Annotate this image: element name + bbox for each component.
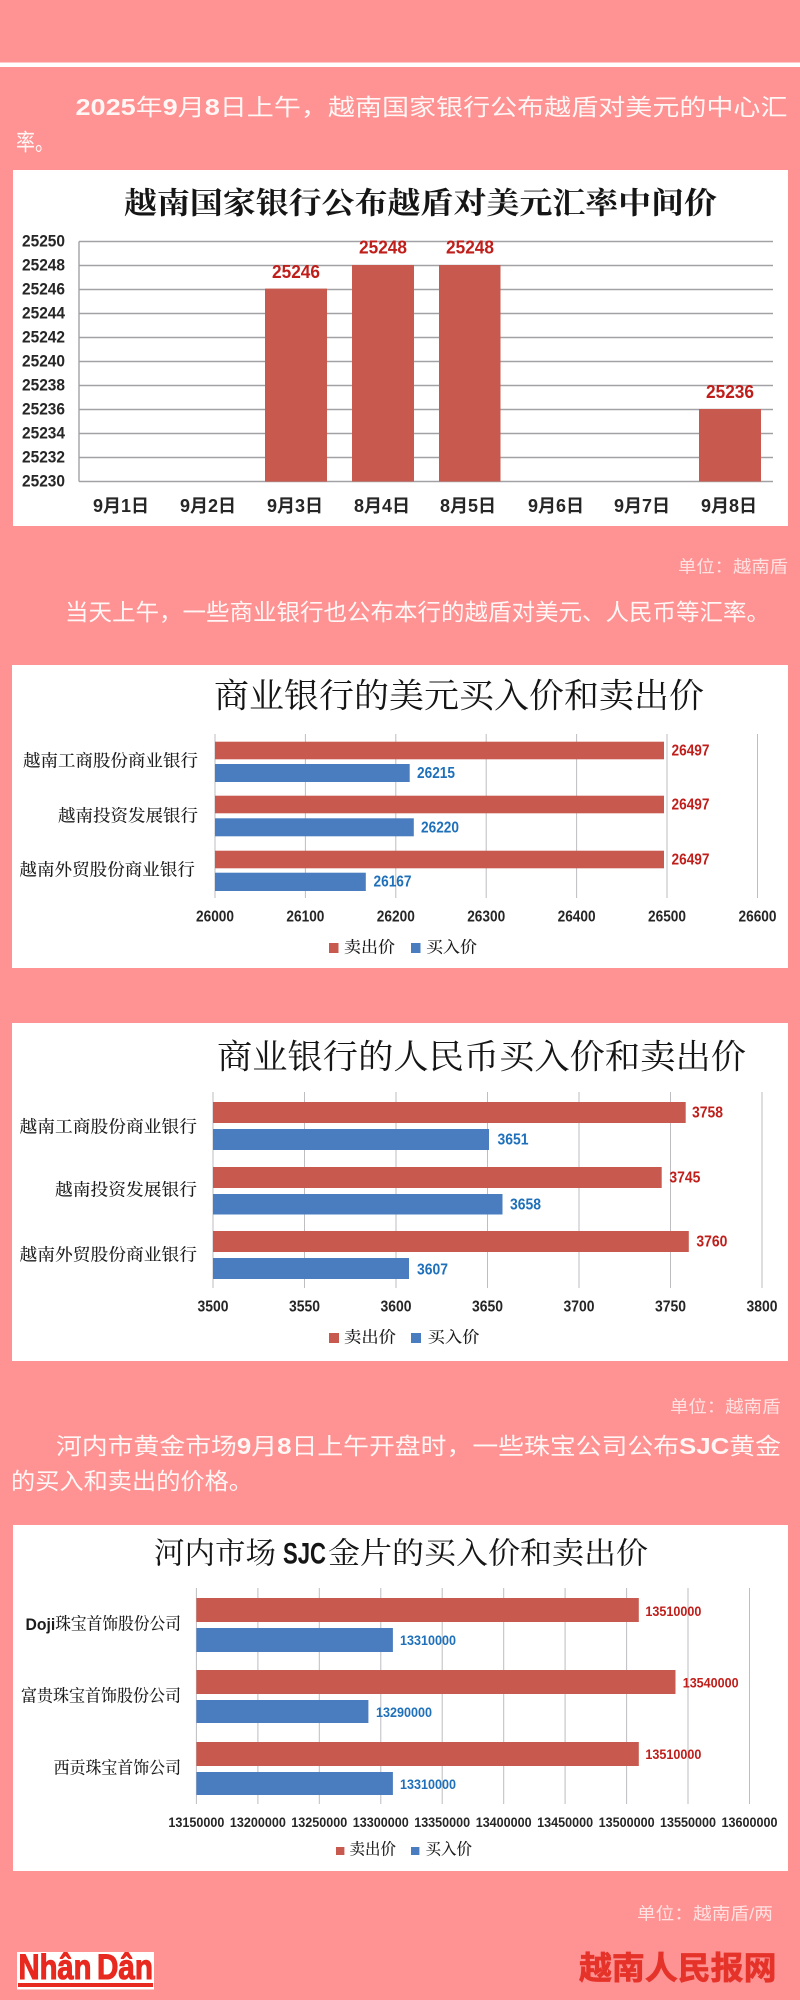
x axis labels: 3650: [472, 1298, 503, 1316]
x axis labels: 3800: [746, 1298, 778, 1316]
chart title: RMB: 商业银行的人民币买入价和卖出价: [217, 1038, 746, 1076]
chart title: SJC gold: SJC: [283, 1538, 326, 1570]
x axis labels: 26100: [286, 908, 324, 926]
text: gold market: [11, 1433, 781, 1494]
legend: 买入价: [426, 938, 477, 956]
value labels: 13310000: [400, 1632, 456, 1648]
x axis labels: 13350000: [414, 1814, 470, 1830]
x axis labels: 3700: [564, 1298, 595, 1316]
column value labels: 25246: [272, 262, 320, 282]
x axis date labels: 9月3日: [267, 496, 323, 516]
sell bars: [213, 1102, 689, 1252]
panel: RMB bar chart: [12, 1023, 788, 1361]
column value labels: 25236: [706, 382, 754, 402]
bank labels: [20, 1118, 197, 1264]
x axis date labels: [93, 496, 757, 516]
unit note 3: 单位：越南盾/两: [637, 1904, 773, 1924]
y axis labels: 25250: [22, 232, 65, 250]
y axis labels: 25236: [22, 400, 65, 418]
logo: Nhan Dan: Nhân: [18, 1948, 92, 1987]
x axis labels: 13600000: [722, 1814, 778, 1830]
x axis date labels: 9月8日: [701, 496, 757, 516]
y axis labels: [22, 232, 65, 490]
bank labels: 越南投资发展银行: [58, 806, 198, 826]
x axis labels: 26600: [738, 908, 777, 926]
x axis date labels: 8月5日: [440, 496, 496, 516]
x axis labels: 13400000: [476, 1814, 532, 1830]
panel: SJC gold bar chart: [13, 1525, 788, 1871]
bank labels: 越南外贸股份商业银行: [20, 1246, 197, 1264]
column value labels: 25248: [446, 238, 494, 258]
text: gold market: 河内市黄金市场 9月8日上午开盘时，一些珠宝公司公布 SJC黄金: [56, 1433, 781, 1459]
value labels: 26220: [421, 820, 459, 836]
value labels: 26497: [672, 852, 710, 868]
logo: Nhan Dan: Dân: [97, 1948, 153, 1987]
y axis labels: 25246: [22, 280, 65, 298]
x axis labels: 3750: [655, 1298, 686, 1316]
unit note 1: 单位：越南盾: [678, 558, 788, 576]
legend: 卖出价: [344, 938, 395, 956]
x axis labels: [168, 1814, 778, 1830]
brand text: Vietnam People's Daily online: 越南人民报网: [579, 1950, 776, 1986]
value labels: [417, 1104, 727, 1278]
chart title: USD: 商业银行的美元买入价和卖出价: [214, 678, 704, 716]
y axis labels: 25244: [22, 304, 65, 322]
x axis labels: 3550: [289, 1298, 320, 1316]
buy bars: [215, 764, 414, 891]
x axis date labels: 9月2日: [180, 496, 236, 516]
intro text: central rate announcement: 率。: [16, 129, 54, 155]
value labels: 13310000: [400, 1776, 456, 1792]
x axis labels: 13550000: [660, 1814, 716, 1830]
x axis labels: 26400: [558, 908, 596, 926]
x axis date labels: 8月4日: [354, 496, 410, 516]
y axis labels: 25242: [22, 328, 65, 346]
x axis labels: 26500: [648, 908, 686, 926]
value labels: 3658: [510, 1196, 541, 1214]
x axis labels: 13300000: [353, 1814, 409, 1830]
value labels: 13510000: [645, 1603, 702, 1619]
text: gold market: 的买入和卖出的价格。: [11, 1468, 253, 1494]
x axis labels: 3600: [380, 1298, 412, 1316]
legend: [329, 1328, 480, 1346]
intro text: central rate announcement: [16, 94, 788, 155]
y axis labels: 25248: [22, 256, 65, 274]
buy bars: [213, 1129, 502, 1279]
value labels: 3745: [669, 1170, 700, 1186]
x axis labels: 13200000: [230, 1814, 286, 1830]
logo: Nhan Dan: [17, 1948, 154, 1990]
x axis labels: 13450000: [537, 1814, 593, 1830]
x axis date labels: 9月1日: [93, 496, 149, 516]
text: commercial banks rates: 当天上午，一些商业银行也公布本行的越盾对美元、人民币等汇率。: [65, 599, 770, 625]
sell bars: [215, 742, 664, 868]
column value labels: 25248: [359, 238, 407, 258]
company labels: 西贡珠宝首饰公司: [54, 1758, 181, 1778]
value labels: 26167: [374, 874, 412, 890]
value labels: 26215: [417, 765, 455, 782]
chart title: SJC gold: 河内市场: [154, 1538, 276, 1570]
value labels: 3607: [417, 1262, 448, 1278]
x axis date labels: 9月6日: [528, 496, 584, 516]
y axis labels: 25238: [22, 376, 65, 394]
chart title: SJC gold: 金片的买入价和卖出价: [328, 1538, 648, 1570]
x axis date labels: 9月7日: [614, 496, 670, 516]
company labels: Doji珠宝首饰股份公司: [26, 1614, 181, 1634]
x axis labels: 26200: [377, 908, 415, 926]
legend: 卖出价: [344, 1328, 396, 1346]
bank labels: [19, 752, 198, 880]
legend: 买入价: [428, 1328, 480, 1346]
bank labels: 越南投资发展银行: [55, 1180, 197, 1200]
bank labels: 越南工商股份商业银行: [23, 752, 198, 770]
buy bars: [196, 1628, 393, 1795]
x axis labels: 26300: [467, 908, 505, 926]
x axis labels: 13250000: [291, 1814, 347, 1830]
value labels: 3758: [692, 1104, 723, 1122]
x axis labels: 3500: [198, 1298, 229, 1316]
unit note 2: 单位：越南盾: [670, 1398, 780, 1416]
value labels: 26497: [672, 742, 710, 760]
legend: 卖出价: [350, 1840, 396, 1858]
value labels: 3651: [498, 1132, 529, 1148]
x axis labels: [198, 1298, 778, 1316]
y axis labels: 25240: [22, 352, 65, 370]
bank labels: 越南外贸股份商业银行: [19, 860, 195, 880]
column value labels: [272, 238, 754, 402]
panel: central rate column chart: [13, 170, 788, 526]
y axis labels: 25234: [22, 424, 65, 442]
x axis labels: 13150000: [168, 1814, 225, 1830]
legend: [329, 938, 477, 956]
x axis labels: 13500000: [599, 1814, 655, 1830]
value labels: [374, 742, 710, 890]
company labels: 富贵珠宝首饰股份公司: [21, 1686, 181, 1706]
x axis labels: [196, 908, 777, 926]
legend: 买入价: [426, 1840, 472, 1858]
y axis labels: 25232: [22, 448, 65, 466]
legend: [336, 1840, 472, 1858]
bank labels: 越南工商股份商业银行: [20, 1118, 197, 1136]
value labels: 13540000: [683, 1675, 739, 1691]
columns: [265, 265, 761, 482]
intro text: central rate announcement: 2025 年9月8日上午，越南国家银行公布越盾对美元的中心汇: [76, 94, 788, 120]
value labels: 13510000: [645, 1746, 702, 1762]
value labels: [376, 1603, 739, 1792]
company labels: [21, 1614, 181, 1778]
value labels: 26497: [672, 796, 710, 814]
chart title: SJC gold: [154, 1538, 648, 1570]
chart title: central rate: 越南国家银行公布越盾对美元汇率中间价: [124, 188, 717, 220]
value labels: 13290000: [376, 1704, 432, 1720]
sell bars: [196, 1598, 676, 1766]
value labels: 3760: [696, 1234, 727, 1250]
x axis labels: 26000: [196, 908, 234, 926]
y axis labels: 25230: [22, 472, 65, 490]
panel: USD bar chart: [12, 665, 788, 968]
